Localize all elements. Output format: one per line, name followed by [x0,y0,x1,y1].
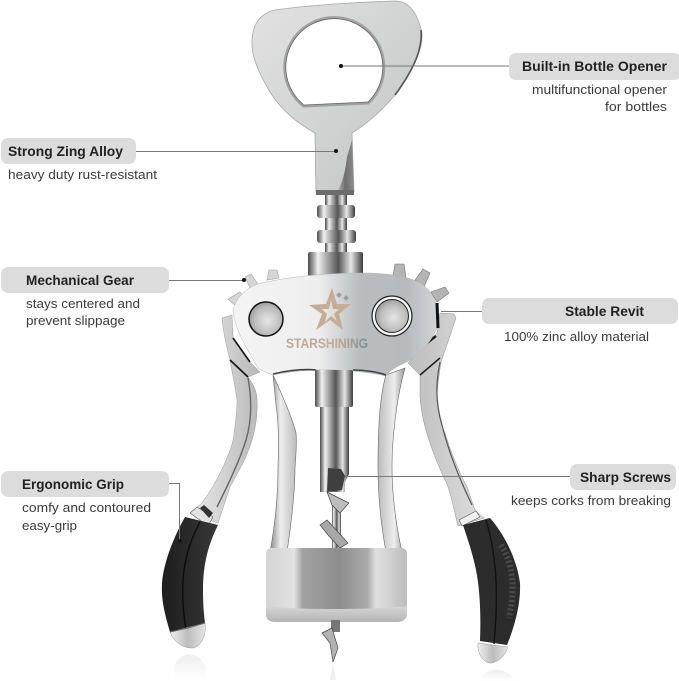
callout: sharp screws: Sharp Screws [580,470,671,485]
brand logo [286,288,368,351]
left grip [162,517,218,648]
corkscrew product illustration [162,1,520,681]
callout: built-in bottle opener: Built-in Bottle Opener [522,59,668,74]
callout: sharp screws [345,464,676,508]
callout: mechanical gear: Mechanical Gear [26,273,135,288]
callout: stable rivet: Stable Revit [565,304,645,319]
callout: ergonomic grip: comfy and contoured [22,500,151,515]
frame legs [270,368,405,552]
left rivet [249,302,283,336]
left gear teeth [228,270,279,306]
callout: built-in bottle opener: for bottles [605,99,668,114]
screw tip [322,620,340,662]
left lever arm [190,315,260,526]
brand logo: STARSHINING [286,335,368,351]
right rivet [372,296,412,336]
callout: strong zing alloy: heavy duty rust-resistant [8,167,157,182]
callout: built-in bottle opener: multifunctional opener [532,82,668,97]
callout: mechanical gear [1,267,246,328]
callout: stable rivet: 100% zinc alloy material [504,329,649,344]
grip reflections [174,654,514,681]
screw spiral [320,468,349,548]
screw shaft [315,370,353,550]
callout: sharp screws: keeps corks from breaking [511,493,671,508]
right grip [463,518,520,663]
callout: ergonomic grip [1,471,182,543]
callout: mechanical gear: stays centered and [26,296,140,311]
callout: mechanical gear: prevent slippage [26,313,125,328]
callout: built-in bottle opener [339,53,679,114]
callout: stable rivet [441,298,678,344]
top handle with bottle opener [252,1,422,192]
callout: strong zing alloy: Strong Zing Alloy [8,144,123,159]
main plate [233,273,438,376]
callout: ergonomic grip: easy-grip [22,518,77,533]
base cup [266,548,407,622]
callout: ergonomic grip: Ergonomic Grip [22,477,124,492]
neck with rings [308,190,363,276]
right lever arm [405,313,484,526]
callout: strong zing alloy [1,138,338,182]
right gear teeth [393,264,449,302]
